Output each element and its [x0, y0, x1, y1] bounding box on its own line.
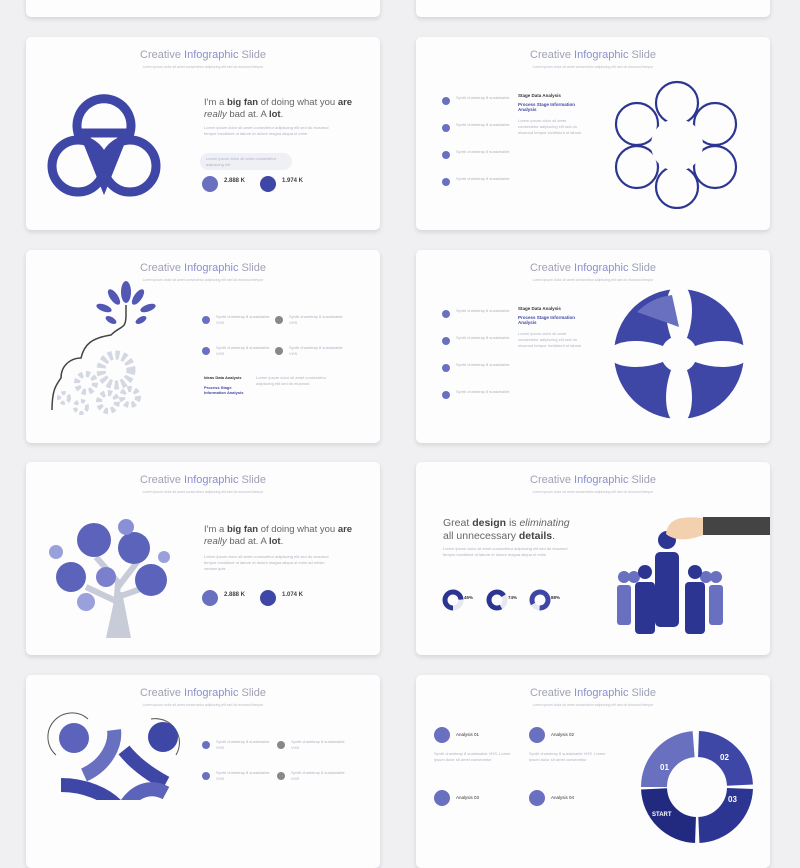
- middle text: [518, 306, 582, 348]
- list items: [442, 95, 510, 186]
- analysis items: Analysis 01: [456, 732, 479, 737]
- heading: Great design is eliminating all unnecessary details.: [443, 517, 570, 542]
- subtitle: Lorem ipsum dolor sit amet consectetur adipiscing elit sed do eiusmod tempor: [533, 278, 653, 282]
- heading: I'm a big fan of doing what you are really bad at. A lot.: [204, 524, 352, 547]
- subtitle: Lorem ipsum dolor sit amet consectetur adipiscing elit sed do eiusmod tempor: [533, 65, 653, 69]
- list items: Synth chambray 8 sustainable: [456, 308, 510, 313]
- donut charts: 45%: [464, 595, 473, 600]
- bottom text: Process Stage Information Analysis: [204, 385, 243, 395]
- body text: Lorem ipsum dolor sit amet consectetur adipiscing elit sed do eiusmod tempor incididunt ut labore et dolore magna aliqua ut enim ad minim veniam quis: [204, 554, 329, 571]
- heading: I'm a big fan of doing what you are really bad at. A lot.: [204, 97, 352, 120]
- plant and gears graphic: [51, 281, 156, 415]
- feature items grid: Synth chambray 8 sustainable VHS: [289, 314, 343, 325]
- donut charts: [442, 590, 560, 610]
- list items: Synth chambray 8 sustainable: [456, 389, 510, 394]
- title: Creative Infographic Slide: [530, 687, 656, 699]
- middle text: Lorem ipsum dolor sit amet consectetur adipiscing elit sed do eiusmod tempor incididunt ut labore: [518, 331, 581, 348]
- middle text: Lorem ipsum dolor sit amet consectetur adipiscing elit sed do eiusmod tempor incididunt ut labore: [518, 118, 581, 135]
- bottom text: Ideas Data Analysis: [204, 375, 241, 380]
- stats: 2.888 K: [224, 178, 245, 184]
- feature items grid: [202, 739, 345, 781]
- tree graphic: [49, 519, 170, 638]
- slide 2: circles flower: [416, 37, 770, 230]
- slide 3: gears plant: [26, 250, 380, 443]
- analysis items: Analysis 03: [456, 795, 479, 800]
- list items: Synth chambray 8 sustainable: [456, 362, 510, 367]
- subtitle: Lorem ipsum dolor sit amet consectetur adipiscing elit sed do eiusmod tempor: [143, 703, 263, 707]
- stats: 2.888 K: [224, 592, 245, 598]
- bottom text: Lorem ipsum dolor sit amet consectetur adipiscing elit sed do eiusmod: [256, 375, 326, 386]
- arcs graphic: [47, 712, 180, 800]
- middle text: Process Stage Information Analysis: [518, 102, 575, 112]
- subtitle: Lorem ipsum dolor sit amet consectetur adipiscing elit sed do eiusmod tempor: [533, 703, 653, 707]
- bottom text: [204, 375, 326, 395]
- slide 4: circle leaves: [416, 250, 770, 443]
- analysis items: Analysis 04: [551, 795, 574, 800]
- body text: Lorem ipsum dolor sit amet consectetur adipiscing elit sed do eiusmod tempor incididunt ut labore et dolore magna aliqua ut enim: [443, 546, 568, 557]
- pill: [200, 153, 292, 170]
- slide 1: trefoil: [26, 37, 380, 230]
- stats: [202, 590, 303, 606]
- title: Creative Infographic Slide: [530, 49, 656, 61]
- title: Creative Infographic Slide: [140, 49, 266, 61]
- slide: top partial: [26, 0, 380, 17]
- feature items grid: Synth chambray 8 sustainable VHS: [216, 314, 270, 325]
- slide 7: arrows cross: [26, 675, 380, 868]
- middle text: [518, 93, 582, 135]
- cycle graphic: 03: [728, 795, 737, 804]
- title: Creative Infographic Slide: [530, 262, 656, 274]
- list items: [442, 308, 510, 399]
- body text: Lorem ipsum dolor sit amet consectetur adipiscing elit sed do eiusmod tempor incididunt ut labore et dolore magna aliqua ut enim: [204, 125, 329, 136]
- feature items grid: Synth chambray 8 sustainable VHS: [216, 770, 270, 781]
- title: Creative Infographic Slide: [140, 687, 266, 699]
- feature items grid: Synth chambray 8 sustainable VHS: [216, 739, 270, 750]
- feature items grid: Synth chambray 8 sustainable VHS: [291, 770, 345, 781]
- donut charts: 74%: [508, 595, 517, 600]
- cycle graphic: [641, 731, 753, 843]
- slide 8: cycle: [416, 675, 770, 868]
- stats: [202, 176, 303, 192]
- list items: Synth chambray 8 sustainable: [456, 176, 510, 181]
- leaf circle graphic: [614, 290, 744, 418]
- list items: Synth chambray 8 sustainable: [456, 149, 510, 154]
- flower graphic: [614, 80, 738, 209]
- analysis items: [434, 727, 606, 806]
- cycle graphic: START: [652, 812, 672, 818]
- analysis items: Synth chambray 8 sustainable VHS. Lorem ipsum dolor sit amet consectetur: [529, 751, 605, 762]
- feature items grid: [202, 314, 343, 356]
- title: Creative Infographic Slide: [140, 262, 266, 274]
- list items: Synth chambray 8 sustainable: [456, 335, 510, 340]
- slide: top partial right: [416, 0, 770, 17]
- middle text: Stage Data Analysis: [518, 93, 561, 98]
- list items: Synth chambray 8 sustainable: [456, 122, 510, 127]
- title: Creative Infographic Slide: [140, 474, 266, 486]
- cycle graphic: 02: [720, 753, 729, 762]
- feature items grid: Synth chambray 8 sustainable VHS: [291, 739, 345, 750]
- people graphic: [617, 517, 770, 634]
- slide 5: tree: [26, 462, 380, 655]
- subtitle: Lorem ipsum dolor sit amet consectetur adipiscing elit sed do eiusmod tempor: [143, 490, 263, 494]
- stats: 1.074 K: [282, 592, 303, 598]
- subtitle: Lorem ipsum dolor sit amet consectetur adipiscing elit sed do eiusmod tempor: [533, 490, 653, 494]
- stats: 1.974 K: [282, 178, 303, 184]
- analysis items: Synth chambray 8 sustainable VHS. Lorem ipsum dolor sit amet consectetur: [434, 751, 510, 762]
- title: Creative Infographic Slide: [530, 474, 656, 486]
- pill: Lorem ipsum dolor sit amet consectetur adipiscing elit: [206, 156, 276, 167]
- trefoil graphic: [48, 94, 160, 196]
- slide 6: people: [416, 462, 770, 655]
- middle text: Process Stage Information Analysis: [518, 315, 575, 325]
- subtitle: Lorem ipsum dolor sit amet consectetur adipiscing elit sed do eiusmod tempor: [143, 65, 263, 69]
- list items: Synth chambray 8 sustainable: [456, 95, 510, 100]
- cycle graphic: 01: [660, 763, 669, 772]
- middle text: Stage Data Analysis: [518, 306, 561, 311]
- donut charts: 88%: [551, 595, 560, 600]
- feature items grid: Synth chambray 8 sustainable VHS: [289, 345, 343, 356]
- analysis items: Analysis 02: [551, 732, 574, 737]
- subtitle: Lorem ipsum dolor sit amet consectetur adipiscing elit sed do eiusmod tempor: [143, 278, 263, 282]
- feature items grid: Synth chambray 8 sustainable VHS: [216, 345, 270, 356]
